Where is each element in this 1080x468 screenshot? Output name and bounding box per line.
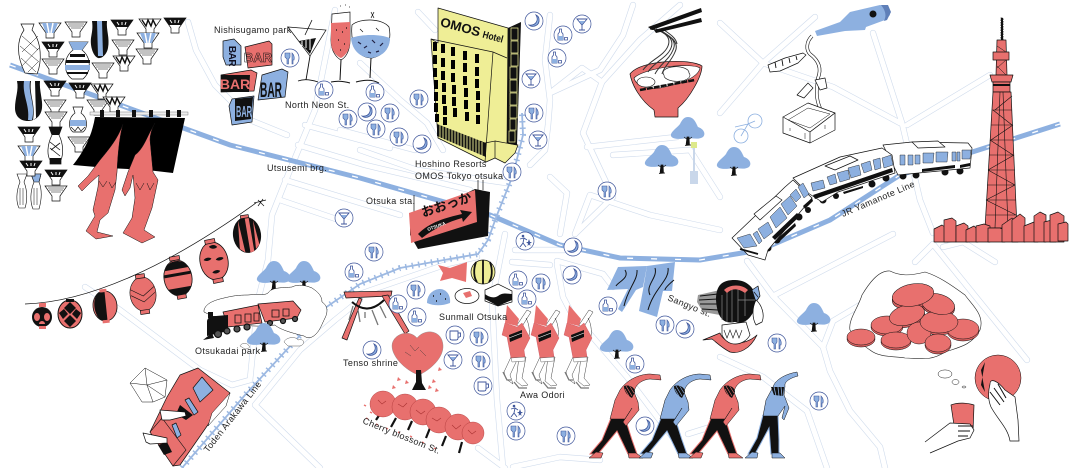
- noodles: [643, 29, 677, 74]
- tree: [645, 145, 678, 174]
- martini glass: [288, 20, 326, 82]
- icon: bicycle: [734, 114, 762, 143]
- label: Hoshino Resorts OMOS Tokyo otsuka: OMOS Tokyo otsuka: [415, 171, 503, 181]
- wine glass: [351, 12, 390, 83]
- small clouds: [240, 338, 304, 349]
- lattice vase: [18, 24, 40, 74]
- trunk: [412, 370, 426, 390]
- icon: fork and knife: [525, 104, 543, 122]
- icon: fork and knife: [407, 281, 425, 299]
- cube: [485, 284, 512, 306]
- dark lattice vase: [48, 127, 63, 164]
- icon: fork and knife: [281, 49, 299, 67]
- car two: [793, 148, 895, 204]
- icon: fork and knife: [598, 182, 616, 200]
- label: JR Yamanote Line: JR Yamanote Line: [840, 179, 916, 219]
- lantern five: [160, 254, 195, 301]
- pockets: [99, 181, 154, 190]
- tokkuri: [768, 53, 806, 72]
- lantern four: [127, 272, 159, 316]
- label: Toden Arakawa Line: Toden Arakawa Line: [202, 379, 263, 454]
- label: Hoshino Resorts OMOS Tokyo otsuka: [415, 159, 503, 181]
- label: Sangyo st.: Sangyo st.: [666, 293, 713, 319]
- tower lattice: [986, 92, 1016, 228]
- Yamanote train: [732, 141, 972, 260]
- hand holding manju: [975, 355, 1021, 441]
- icon: fork and knife: [532, 274, 550, 292]
- Awa Odori dancers: [502, 305, 593, 388]
- blue and black BAR sign: BAR: [236, 104, 252, 121]
- icon: moon: [563, 266, 581, 284]
- Toden tram with hands: [130, 368, 230, 466]
- icon: bottle: [554, 26, 572, 44]
- bowl body: [630, 61, 702, 117]
- OMOS Hotel building: [431, 8, 521, 163]
- train wheels: [214, 316, 298, 338]
- icon: bottle: [408, 308, 426, 326]
- kimono collar: [703, 333, 757, 352]
- ramen toppings: [637, 67, 690, 87]
- bottle: [815, 5, 890, 36]
- deck two: [990, 75, 1013, 82]
- icon: cup: [446, 326, 464, 344]
- lantern seven: [230, 213, 263, 255]
- curtain rod: [90, 112, 188, 115]
- icon: moon: [413, 135, 431, 153]
- person three pink: [689, 374, 761, 458]
- person one: [78, 124, 123, 239]
- bowls: [18, 18, 186, 201]
- pink small sign: BAR: [244, 50, 273, 65]
- icon: bottle: [389, 295, 407, 313]
- striped vase: [91, 21, 109, 58]
- Otsuka station sign: OTSUKA: [427, 220, 447, 232]
- carriage windows: [235, 309, 289, 323]
- sake pour: [807, 36, 820, 108]
- label: Cherry blossom St.: Cherry blossom St.: [361, 416, 442, 456]
- steam train and cloud: [203, 285, 327, 352]
- BAR signs: [220, 39, 288, 125]
- icon: fork and knife: [381, 104, 399, 122]
- petals: [392, 367, 442, 392]
- sign lettering: おおっか: [419, 190, 473, 220]
- hair: [716, 280, 756, 323]
- black curtain: [73, 117, 185, 173]
- icon: bottle: [345, 263, 363, 281]
- icon: cup: [474, 377, 492, 395]
- hair ornaments: [752, 286, 760, 302]
- manju rims: [847, 284, 979, 354]
- cocktail glasses: [288, 5, 390, 83]
- deck one: [993, 52, 1009, 60]
- cherry blossom trees: [364, 391, 484, 453]
- tree: [717, 147, 750, 176]
- small blue vase: [69, 107, 87, 132]
- hotel black side: [507, 22, 521, 145]
- icon: fork and knife: [656, 316, 674, 334]
- icon: martini: [573, 15, 591, 33]
- icon: moon: [525, 12, 543, 30]
- dancer one: [502, 305, 531, 388]
- Toden Arakawa tram line: [182, 113, 523, 468]
- stretching people: [589, 372, 798, 458]
- blue cloth: [607, 262, 675, 317]
- masu box: [783, 103, 835, 132]
- Otsuka station sign: [409, 180, 490, 249]
- hotel sign: [439, 14, 506, 46]
- cloud outline: [850, 271, 981, 359]
- city buildings: [934, 212, 1068, 242]
- label: Hoshino Resorts OMOS Tokyo otsuka: Hoshino Resorts: [415, 159, 487, 169]
- sign black body: [410, 189, 490, 249]
- label: Tenso shrine: Tenso shrine: [343, 358, 398, 368]
- icon: bottle: [366, 83, 384, 101]
- person two: [122, 123, 158, 243]
- icon: bottle: [518, 290, 536, 308]
- icon: fork and knife: [507, 422, 525, 440]
- watermelon: [471, 260, 495, 284]
- dancer three: [564, 305, 593, 388]
- wing windows: [433, 42, 480, 125]
- tree: [287, 261, 320, 290]
- icon: martini: [444, 351, 462, 369]
- blue dome: [427, 289, 450, 305]
- icon: bottle: [315, 81, 333, 99]
- icon: moon: [564, 238, 582, 256]
- lantern one: [32, 303, 52, 329]
- sign arrow: [418, 210, 472, 238]
- lantern six: [196, 237, 232, 285]
- label: Awa Odori: Awa Odori: [520, 390, 565, 400]
- blue small sign: BAR: [226, 46, 237, 67]
- icon: martini: [529, 131, 547, 149]
- icon: moon: [363, 341, 381, 359]
- heart cherry tree: [392, 332, 443, 392]
- lantern three: [91, 288, 119, 324]
- tree: [671, 117, 704, 146]
- icon: fork and knife: [367, 120, 385, 138]
- small thought bubbles: [938, 370, 966, 388]
- wing outline: [431, 39, 517, 162]
- icon: moon: [358, 103, 376, 121]
- lantern string: [25, 199, 266, 329]
- tree cluster: [257, 117, 830, 358]
- icon: martini: [522, 70, 540, 88]
- icon: sports: [516, 232, 534, 250]
- bottle label dot: [870, 10, 876, 18]
- lantern two: [58, 299, 82, 328]
- tree: [257, 261, 290, 290]
- label: Nishisugamo park: Nishisugamo park: [214, 25, 292, 35]
- map icons: [281, 12, 828, 445]
- label: North Neon St.: North Neon St.: [285, 100, 349, 110]
- tree: [797, 303, 830, 332]
- hotel body: [431, 8, 518, 163]
- icon: bottle: [548, 49, 566, 67]
- side windows: [509, 28, 518, 142]
- blue BAR sign: BAR: [260, 79, 282, 102]
- manju: [847, 281, 979, 352]
- icon: fork and knife: [472, 352, 490, 370]
- icon: bottle: [509, 271, 527, 289]
- bow: [254, 199, 266, 206]
- banded vase: [65, 42, 90, 79]
- thought bubble with manju pile: [847, 271, 981, 388]
- locomotive: [207, 315, 228, 336]
- dancer two: [531, 305, 560, 388]
- tram windows: [193, 377, 213, 402]
- pink carriages: [223, 301, 301, 327]
- icon: fork and knife: [410, 90, 428, 108]
- car one: [732, 180, 813, 260]
- label: Otsukadai park: Otsukadai park: [195, 346, 261, 356]
- tram black details: [158, 405, 193, 455]
- chopsticks: [648, 8, 702, 33]
- icon: fork and knife: [365, 243, 383, 261]
- icon: moon: [636, 417, 654, 435]
- hotel sign: OMOS: [439, 14, 483, 40]
- car three: [883, 141, 972, 180]
- sake bottle and masu: [768, 5, 891, 143]
- antenna: [1001, 18, 1003, 40]
- label: Otsuka sta.: Otsuka sta.: [366, 196, 415, 206]
- bowl rim pattern: [640, 80, 695, 90]
- tower body: [985, 92, 1017, 228]
- hotel sign: Hotel: [481, 30, 505, 46]
- Tokyo Skytree tower: [934, 18, 1068, 242]
- wire hexagon: [130, 368, 167, 402]
- person four blue: [745, 372, 798, 458]
- label: Utsusemi brg.: Utsusemi brg.: [267, 163, 327, 173]
- bow: [438, 262, 467, 282]
- icon: fork and knife: [470, 328, 488, 346]
- label: Sunmall Otsuka: Sunmall Otsuka: [439, 312, 507, 322]
- icon: fork and knife: [768, 334, 786, 352]
- comb base: [437, 124, 486, 157]
- cups: [797, 78, 827, 98]
- tower upper: [996, 40, 1007, 75]
- JR Yamanote railway line: [10, 65, 1060, 260]
- torii gate: [342, 291, 409, 340]
- sign pink face: [409, 190, 477, 243]
- tram body: [150, 368, 230, 466]
- icon: fork and knife: [339, 110, 357, 128]
- Sunmall shop items: [427, 260, 512, 306]
- tree in front of train: [247, 323, 280, 352]
- person two blue: [639, 374, 711, 458]
- tree: [600, 330, 633, 358]
- tram front details: [208, 393, 230, 426]
- icon: martini: [335, 209, 353, 227]
- icon: moon: [676, 320, 694, 338]
- icon: bottle: [599, 297, 617, 315]
- black and pink BAR sign: BAR: [220, 76, 250, 92]
- panel: pottery collection: [15, 18, 186, 209]
- champagne glass: [331, 5, 350, 83]
- smoke cloud: [204, 285, 327, 338]
- pale vases: [17, 174, 41, 209]
- icon: fork and knife: [557, 427, 575, 445]
- hands: [143, 410, 186, 444]
- icon: bottle: [626, 355, 644, 373]
- icon: fork and knife: [390, 128, 408, 146]
- street lamp: [690, 142, 698, 184]
- large striped vase: [15, 81, 42, 121]
- icon: fork and knife: [503, 163, 521, 181]
- icon: sports: [507, 402, 525, 420]
- icon: fork and knife: [810, 392, 828, 410]
- hand: [753, 300, 763, 325]
- person one pink: [589, 374, 661, 458]
- geisha: [697, 280, 763, 352]
- hand holding cup: [925, 403, 974, 453]
- plate: [455, 288, 479, 304]
- bowl inside: [634, 66, 700, 89]
- left hair strands: [697, 290, 720, 315]
- ramen bowl: [630, 8, 702, 117]
- noren curtain with two people: [73, 110, 188, 243]
